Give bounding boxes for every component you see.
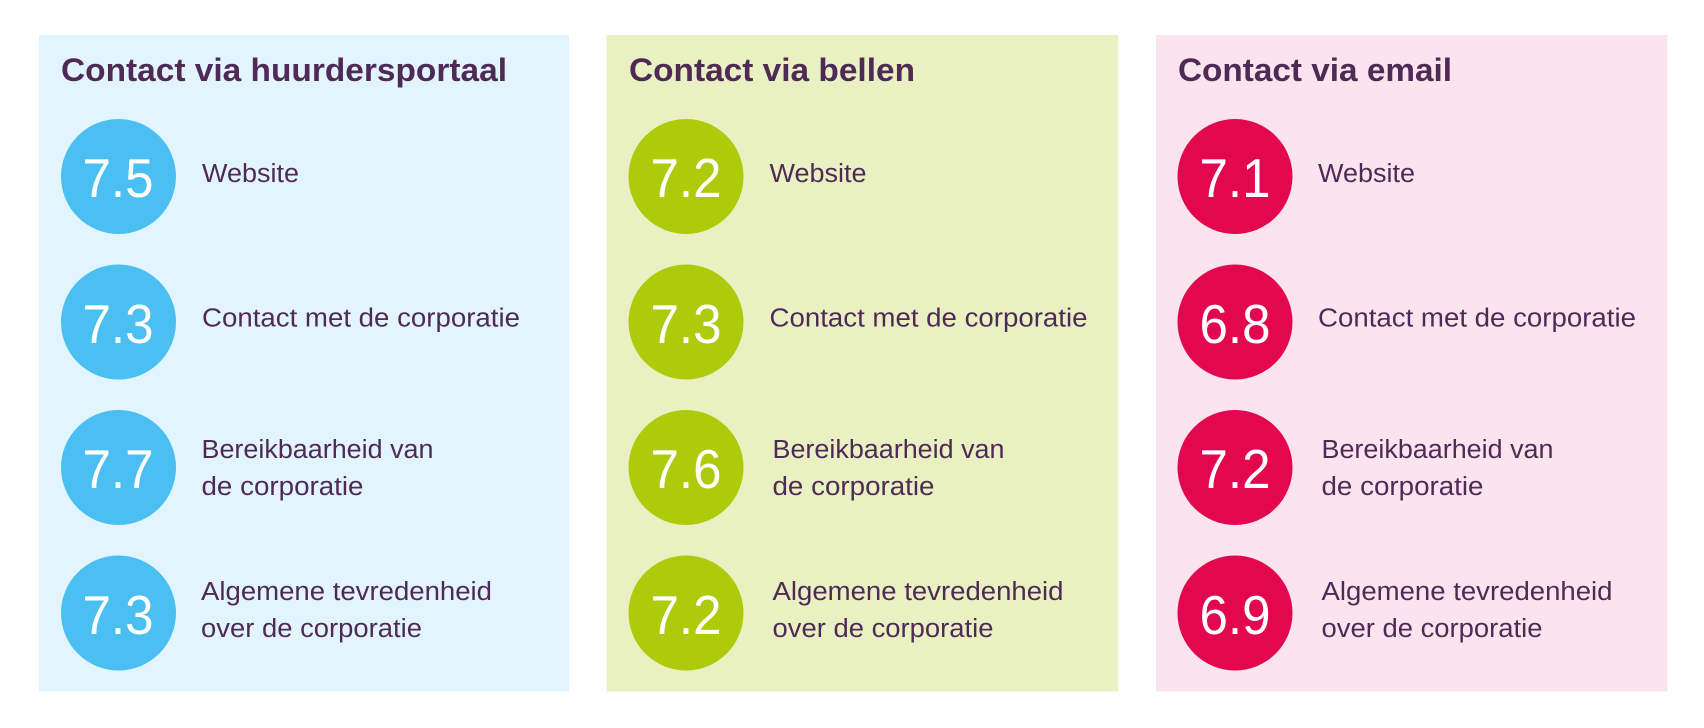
score row: Algemene tevredenheid 7.2 — [628, 556, 1064, 670]
score row: Bereikbaarheid 7.6: de corporatie — [772, 473, 934, 501]
score row: Bereikbaarheid 7.7 — [61, 410, 434, 525]
score row: Contact 7.3: 7.3 — [650, 293, 722, 355]
score row: Algemene tevredenheid 7.3 — [61, 556, 492, 670]
score row: Contact 6.8: 6.8 — [1200, 293, 1270, 355]
score row: Algemene tevredenheid 7.2: over de corporatie — [772, 615, 994, 643]
score row: Algemene tevredenheid 6.9: 6.9 — [1200, 584, 1270, 646]
score row: Contact 7.3 — [61, 264, 520, 380]
panel: bellen — [606, 35, 1118, 692]
score row: Bereikbaarheid 7.7: de corporatie — [202, 473, 364, 501]
score row: Website 7.1: Website — [1318, 160, 1415, 188]
score row: Contact 6.8: Contact met de corporatie — [1318, 304, 1636, 332]
score row: Website 7.2: 7.2 — [650, 147, 722, 209]
score row: Website 7.5 — [61, 119, 299, 234]
score row: Contact 7.3 — [628, 264, 1088, 380]
score row: Website 7.5: 7.5 — [82, 147, 154, 209]
score row: Website 7.2: Website — [770, 160, 866, 188]
score row: Bereikbaarheid 7.2: Bereikbaarheid van — [1322, 436, 1554, 464]
score row: Algemene tevredenheid 7.3: 7.3 — [82, 584, 154, 646]
heading: email: Contact via email — [1178, 52, 1452, 88]
score row: Website 7.2 — [628, 119, 866, 234]
score row: Contact 7.3: Contact met de corporatie — [770, 304, 1088, 332]
score row: Algemene tevredenheid 6.9: Algemene tevredenheid — [1322, 578, 1612, 606]
score row: Bereikbaarheid 7.2: 7.2 — [1200, 438, 1270, 500]
score row: Algemene tevredenheid 7.3: over de corporatie — [201, 615, 422, 643]
score row: Website 7.1: 7.1 — [1200, 147, 1270, 209]
score row: Algemene tevredenheid 6.9 — [1178, 556, 1612, 670]
score row: Bereikbaarheid 7.7: 7.7 — [82, 438, 154, 500]
score row: Algemene tevredenheid 6.9: over de corporatie — [1322, 615, 1542, 643]
panel: email — [1156, 35, 1668, 692]
score row: Contact 7.3: Contact met de corporatie — [202, 304, 520, 332]
score row: Bereikbaarheid 7.6 — [628, 410, 1004, 525]
score row: Bereikbaarheid 7.6: 7.6 — [650, 438, 722, 500]
score row: Bereikbaarheid 7.6: Bereikbaarheid van — [772, 436, 1004, 464]
score row: Contact 7.3: 7.3 — [82, 293, 154, 355]
score row: Bereikbaarheid 7.7: Bereikbaarheid van — [202, 436, 434, 464]
score row: Bereikbaarheid 7.2: de corporatie — [1322, 473, 1484, 501]
score row: Contact 6.8 — [1178, 264, 1636, 380]
heading: huurdersportaal: Contact via huurdersportaal — [61, 52, 507, 88]
panel: huurdersportaal — [39, 35, 569, 692]
score row: Algemene tevredenheid 7.3: Algemene tevredenheid — [201, 578, 492, 606]
score row: Website 7.5: Website — [202, 160, 299, 188]
heading: bellen: Contact via bellen — [629, 52, 915, 88]
score row: Website 7.1 — [1178, 119, 1415, 234]
score row: Algemene tevredenheid 7.2: 7.2 — [650, 584, 722, 646]
score row: Bereikbaarheid 7.2 — [1178, 410, 1554, 525]
score row: Algemene tevredenheid 7.2: Algemene tevredenheid — [772, 578, 1064, 606]
